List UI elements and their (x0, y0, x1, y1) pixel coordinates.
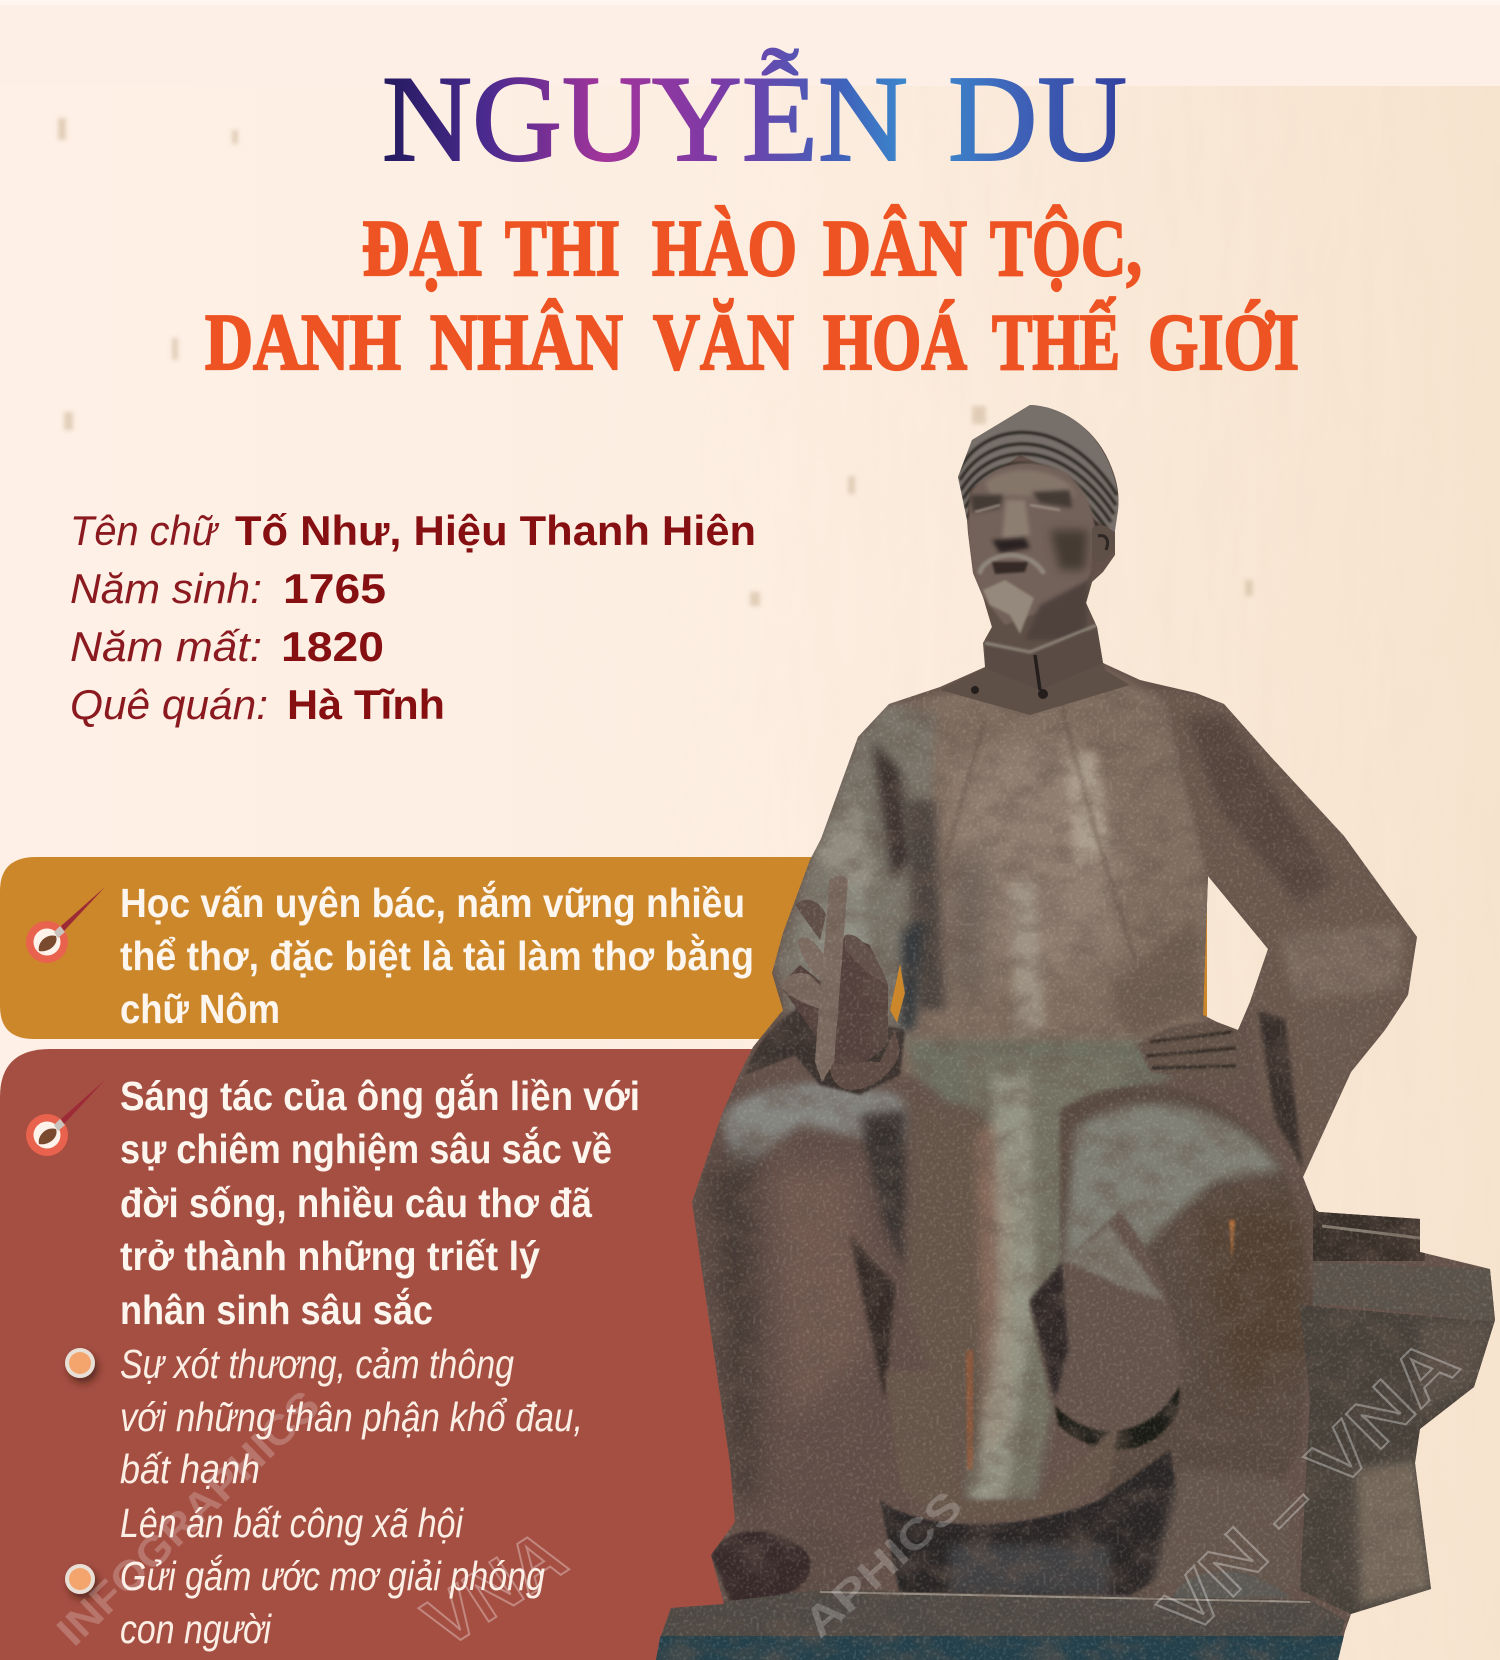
text: works main: đời sống, nhiều câu thơ đã (120, 1180, 592, 1226)
subtitle (205, 205, 1299, 387)
panel: works (0, 1049, 790, 1660)
biography facts: 1765 (283, 565, 386, 612)
statue surface texture (650, 690, 1500, 1660)
text: scholarship: chữ Nôm (120, 986, 280, 1032)
text: themes (120, 1341, 583, 1652)
watermark (48, 1323, 1474, 1660)
biography facts (70, 507, 756, 728)
hanging sleeve flap (1030, 1210, 1180, 1450)
subtitle: DÂN (823, 205, 967, 293)
rock and books (1300, 1205, 1497, 1614)
torso (880, 668, 1212, 1075)
right knee (1060, 1086, 1313, 1600)
text: themes: Lên án bất công xã hội (120, 1500, 465, 1546)
text: themes: Gửi gắm ước mơ giải phóng (120, 1553, 545, 1599)
text: scholarship: Học vấn uyên bác, nắm vững nhiều (120, 880, 745, 926)
text: works main: Sáng tác của ông gắn liền với (120, 1073, 640, 1119)
pedestal (650, 1590, 1350, 1660)
text: works main: sự chiêm nghiệm sâu sắc về (120, 1126, 612, 1172)
left foot (711, 1531, 811, 1602)
lower cloth (796, 1369, 1280, 1596)
right hand (1138, 1022, 1238, 1075)
icon: brush (26, 887, 105, 963)
statue of Nguyễn Du (650, 400, 1500, 1660)
subtitle: THI (505, 205, 620, 293)
subtitle: VĂN (653, 299, 794, 387)
biography facts: Hà Tĩnh (287, 681, 445, 728)
biography facts: Tên chữ (70, 507, 220, 554)
watermark: VN – VNA (1145, 1323, 1474, 1651)
biography facts: Quê quán: (70, 681, 268, 728)
bullet (65, 1348, 95, 1378)
subtitle: NHÂN (430, 299, 623, 387)
left hand and brush (745, 876, 905, 1095)
title: Nguyễn Du (382, 48, 1127, 187)
watermark: APHICS (795, 1481, 971, 1647)
biography facts: Tố Như, Hiệu Thanh Hiên (235, 507, 756, 554)
title: Nguyễn Du: NGUYỄN (382, 48, 908, 187)
watermark: VNA (410, 1515, 580, 1660)
panel: scholarship (0, 857, 1207, 1039)
subtitle: THẾ (992, 297, 1120, 387)
right foot (1174, 1572, 1286, 1598)
left sleeve (775, 704, 945, 1040)
text: themes: con người (120, 1606, 273, 1652)
text: scholarship: thể thơ, đặc biệt là tài làm thơ bằng (120, 933, 754, 979)
text: themes: với những thân phận khổ đau, (120, 1394, 583, 1440)
biography facts: Năm sinh: (70, 565, 262, 612)
subtitle: ĐẠI (362, 205, 483, 293)
biography facts: 1820 (281, 623, 384, 670)
text: themes: bất hạnh (120, 1446, 260, 1492)
right sleeve (1192, 700, 1417, 1174)
title: Nguyễn Du: DU (948, 50, 1127, 187)
head and hat (940, 405, 1130, 715)
subtitle: TỘC, (990, 205, 1142, 293)
text: works main: trở thành những triết lý (120, 1233, 540, 1279)
bullet (65, 1564, 95, 1594)
biography facts: Năm mất: (70, 623, 262, 670)
subtitle: GIỚI (1148, 299, 1299, 387)
text: themes: Sự xót thương, cảm thông (120, 1341, 514, 1387)
watermark: INFOGRAPHICS (48, 1381, 328, 1654)
waist and central drape (905, 1040, 1175, 1500)
text: works main (120, 1073, 640, 1333)
icon: brush (26, 1080, 105, 1156)
subtitle: HÀO (652, 205, 797, 293)
left knee (692, 1078, 1003, 1519)
central white streak (972, 1075, 1036, 1505)
subtitle: HOÁ (823, 299, 967, 387)
text: works main: nhân sinh sâu sắc (120, 1287, 433, 1333)
text: scholarship (120, 880, 754, 1032)
subtitle: DANH (205, 299, 401, 387)
